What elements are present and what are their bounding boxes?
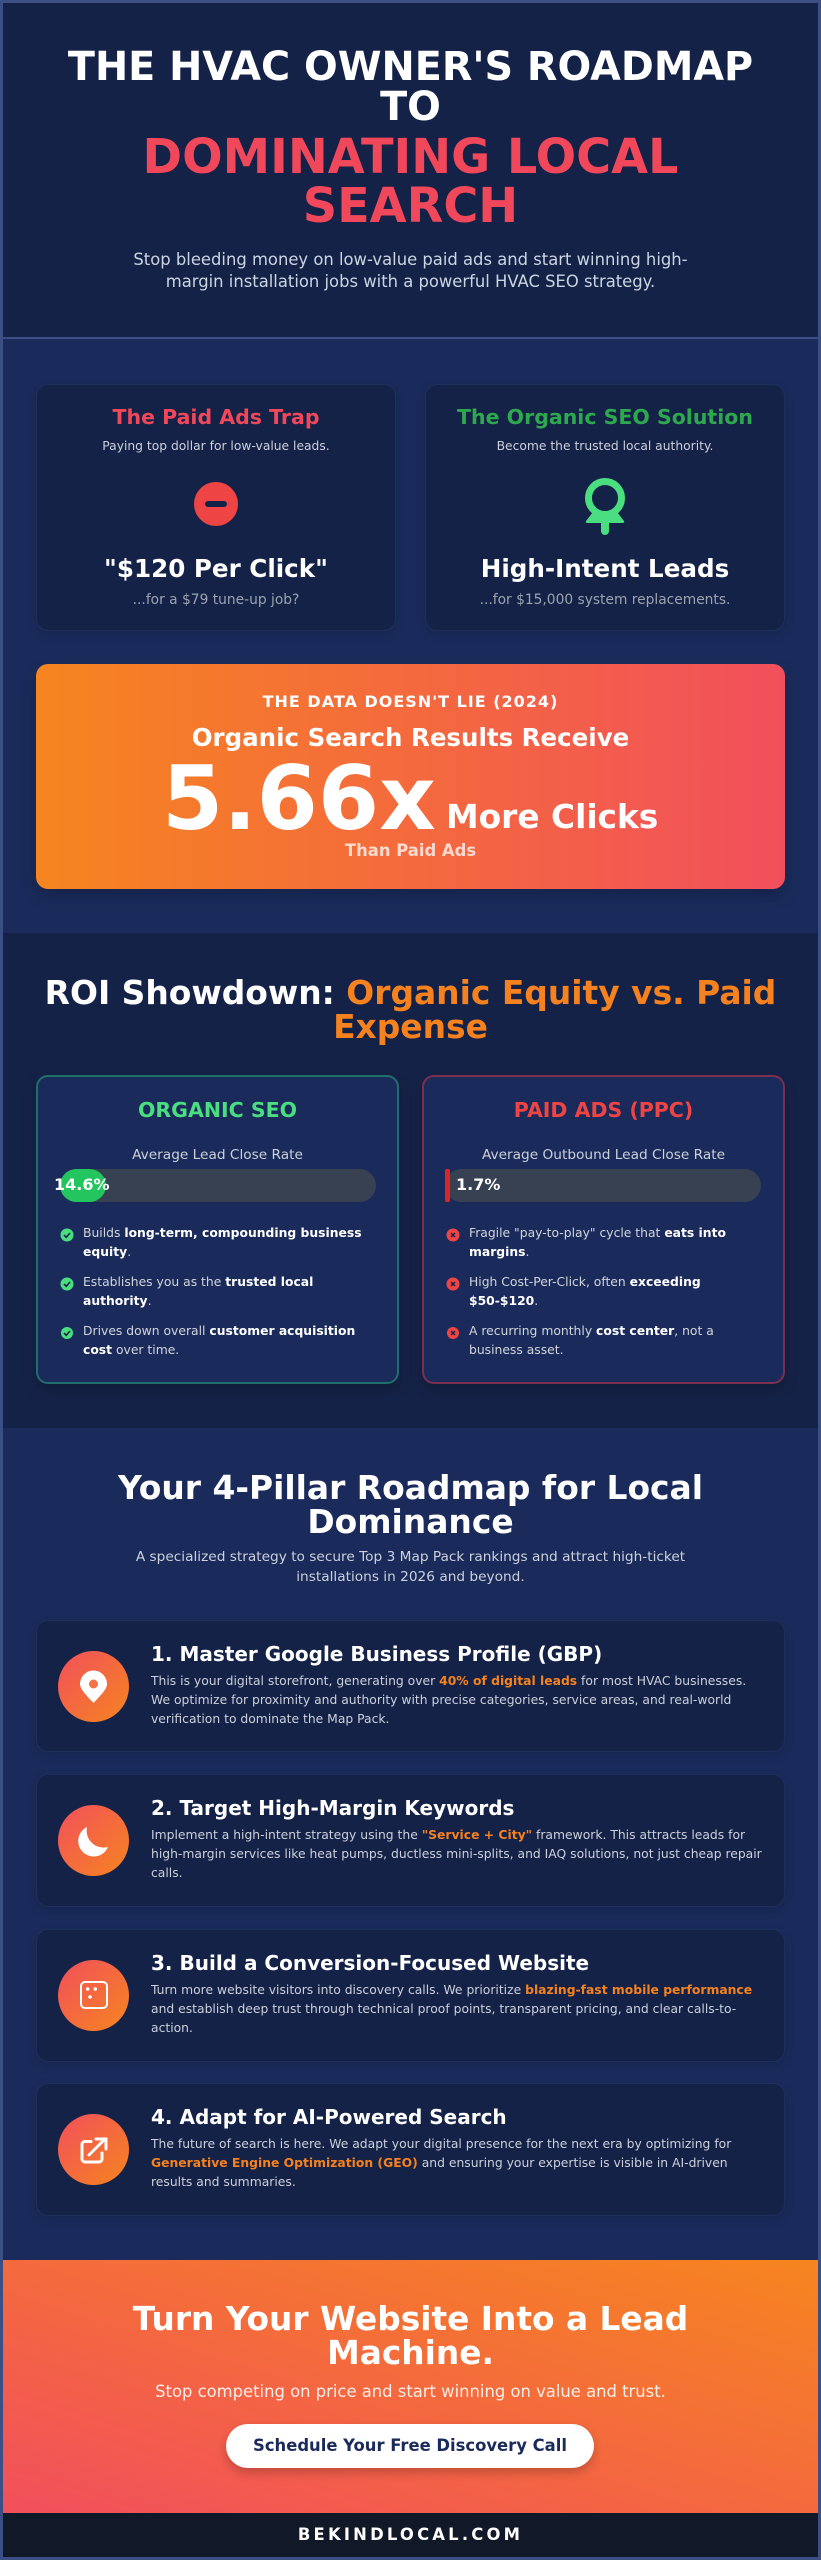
organic bullet list: equity. (83, 1245, 131, 1259)
paid bullet one: margins. (469, 1245, 529, 1259)
paid ads note: ...for a $79 tune-up job? (133, 592, 299, 608)
paid bullet two (469, 1275, 701, 1308)
footer url: BEKINDLOCAL.COM (298, 2525, 523, 2544)
organic bullet two: authority. (83, 1294, 152, 1308)
roi heading: ROI Showdown: Organic Equity vs. Paid (45, 973, 776, 1012)
paid bullet one: Fragile "pay-to-play" cycle that eats into (469, 1226, 726, 1240)
title highlight (143, 130, 678, 234)
header subtitle: Stop bleeding money on low-value paid ads and start winning high- (133, 250, 688, 269)
organic rate bar (60, 1169, 376, 1202)
callout eyebrow: THE DATA DOESN'T LIE (2024) (263, 692, 558, 711)
organic bullet two: Establishes you as the trusted local (83, 1275, 313, 1289)
paid bullet two: $50-$120. (469, 1294, 538, 1308)
paid bullet three (469, 1324, 714, 1357)
organic rate fill (60, 1169, 106, 1202)
footer (3, 2513, 818, 2557)
roadmap subtitle: installations in 2026 and beyond. (296, 1568, 525, 1584)
paid bullet three: business asset. (469, 1343, 564, 1357)
pillar 1 text: This is your digital storefront, generating over 40% of digital leads for most HVAC businesses. (151, 1674, 746, 1688)
pillar 2 text: high-margin services like heat pumps, ductless mini-splits, and IAQ solutions, not just cheap repair (151, 1847, 762, 1861)
paid bullet three: A recurring monthly cost center, not a (469, 1324, 714, 1338)
paid bullet one (469, 1226, 726, 1259)
pillar 4 text: results and summaries. (151, 2175, 296, 2189)
pillar 4 text: Generative Engine Optimization (GEO) and ensuring your expertise is visible in AI-driven (151, 2156, 728, 2170)
panel: paid ads trap (36, 384, 396, 631)
callout note: Than Paid Ads (345, 841, 476, 860)
cta heading: Turn Your Website Into a Lead (133, 2300, 688, 2338)
title: THE HVAC OWNER'S ROADMAP (68, 44, 753, 90)
callout heading: Organic Search Results Receive (192, 723, 629, 752)
pillar 1 text: verification to dominate the Map Pack. (151, 1712, 389, 1726)
paid rate value: 1.7% (456, 1175, 500, 1194)
pillar 4 text: The future of search is here. We adapt your digital presence for the next era by optimizing for (151, 2137, 731, 2151)
panel: pillar 3 (36, 1929, 785, 2062)
pillar 3 text: Turn more website visitors into discovery calls. We prioritize blazing-fast mobile performance (151, 1983, 752, 1997)
icon: map pin (58, 1651, 129, 1722)
pillar 4 text (150, 2137, 732, 2189)
paid rate fill (445, 1169, 450, 1202)
organic bullet two (83, 1275, 313, 1308)
title: TO (380, 84, 441, 130)
panel: organic seo column (36, 1075, 399, 1384)
pillar 3 text (150, 1983, 752, 2035)
organic bullet three (83, 1324, 355, 1357)
organic close-rate label: Average Lead Close Rate (132, 1147, 303, 1163)
icon: green ring (585, 478, 625, 535)
pillar 3 text: and establish deep trust through technical proof points, transparent pricing, and clear calls-to- (151, 2002, 736, 2016)
organic rate value: 14.6% (54, 1175, 110, 1194)
panel: paid ads column (422, 1075, 785, 1384)
organic bullet three: cost over time. (83, 1343, 179, 1357)
paid column heading: PAID ADS (PPC) (514, 1098, 693, 1122)
organic bullet three: Drives down overall customer acquisition (83, 1324, 355, 1338)
roadmap subtitle (136, 1549, 685, 1584)
panel: pillar 2 (36, 1774, 785, 1907)
paid bullet two: High Cost-Per-Click, often exceeding (469, 1275, 701, 1289)
organic column heading: ORGANIC SEO (138, 1098, 297, 1122)
more clicks: More Clicks (446, 798, 658, 836)
pillar 4 heading: 4. Adapt for AI-Powered Search (151, 2105, 507, 2129)
organic bullet icons (60, 1228, 74, 1339)
header subtitle: margin installation jobs with a powerful HVAC SEO strategy. (166, 272, 655, 291)
paid ads heading: The Paid Ads Trap (112, 405, 320, 429)
pillar 2 heading: 2. Target High-Margin Keywords (151, 1796, 514, 1820)
cta button (226, 2424, 594, 2468)
paid bullet icons (446, 1228, 460, 1339)
icon: external link (58, 2114, 129, 2185)
roadmap heading: Dominance (307, 1502, 514, 1541)
roadmap heading (118, 1468, 703, 1541)
paid close-rate label: Average Outbound Lead Close Rate (482, 1147, 725, 1163)
organic bullet list (83, 1226, 362, 1259)
paid ads subtext: Paying top dollar for low-value leads. (102, 439, 330, 453)
pillar 3 text: action. (151, 2021, 193, 2035)
panel: call to action (3, 2260, 818, 2513)
panel: data callout (36, 664, 785, 889)
cta subtext: Stop competing on price and start winning on value and trust. (155, 2382, 666, 2401)
paid ads stat: "$120 Per Click" (104, 554, 328, 583)
icon: crescent (58, 1805, 129, 1876)
paid rate bar (445, 1169, 761, 1202)
panel: roadmap section (3, 1428, 818, 2260)
pillar 1 heading: 1. Master Google Business Profile (GBP) (151, 1642, 602, 1666)
panel: organic seo solution (425, 384, 785, 631)
roi heading (45, 973, 776, 1046)
panel: problem and solution section (3, 339, 818, 933)
roadmap subtitle: A specialized strategy to secure Top 3 Map Pack rankings and attract high-ticket (136, 1549, 685, 1565)
pillar 2 text (151, 1828, 762, 1880)
pillar 3 heading: 3. Build a Conversion-Focused Website (151, 1951, 589, 1975)
organic note: ...for $15,000 system replacements. (480, 592, 730, 608)
pillar 2 text: calls. (151, 1866, 183, 1880)
pillar 1 text: We optimize for proximity and authority with precise categories, service areas, and real-world (151, 1693, 731, 1707)
organic heading: The Organic SEO Solution (457, 405, 753, 429)
cta heading: Machine. (327, 2334, 494, 2372)
roadmap heading: Your 4-Pillar Roadmap for Local (118, 1468, 703, 1507)
icon: dice (58, 1960, 129, 2031)
cta heading (132, 2300, 688, 2372)
icon: minus circle (194, 482, 238, 526)
organic subtext: Become the trusted local authority. (497, 439, 713, 453)
big stat: 5.66x (162, 747, 436, 850)
pillar 2 text: Implement a high-intent strategy using the "Service + City" framework. This attracts leads for (151, 1828, 745, 1842)
header subtitle (133, 250, 688, 291)
title highlight: SEARCH (303, 178, 518, 234)
panel: pillar 1 (36, 1620, 785, 1752)
roi heading: Expense (333, 1007, 488, 1046)
cta button: Schedule Your Free Discovery Call (253, 2436, 567, 2455)
organic stat: High-Intent Leads (481, 554, 729, 583)
panel: roi section (3, 933, 818, 1428)
header (3, 3, 818, 337)
panel: pillar 4 (36, 2083, 785, 2216)
title (68, 44, 753, 130)
pillar 1 text (150, 1674, 746, 1726)
organic bullet list: Builds long-term, compounding business (83, 1226, 362, 1240)
title highlight: DOMINATING LOCAL (143, 130, 678, 185)
